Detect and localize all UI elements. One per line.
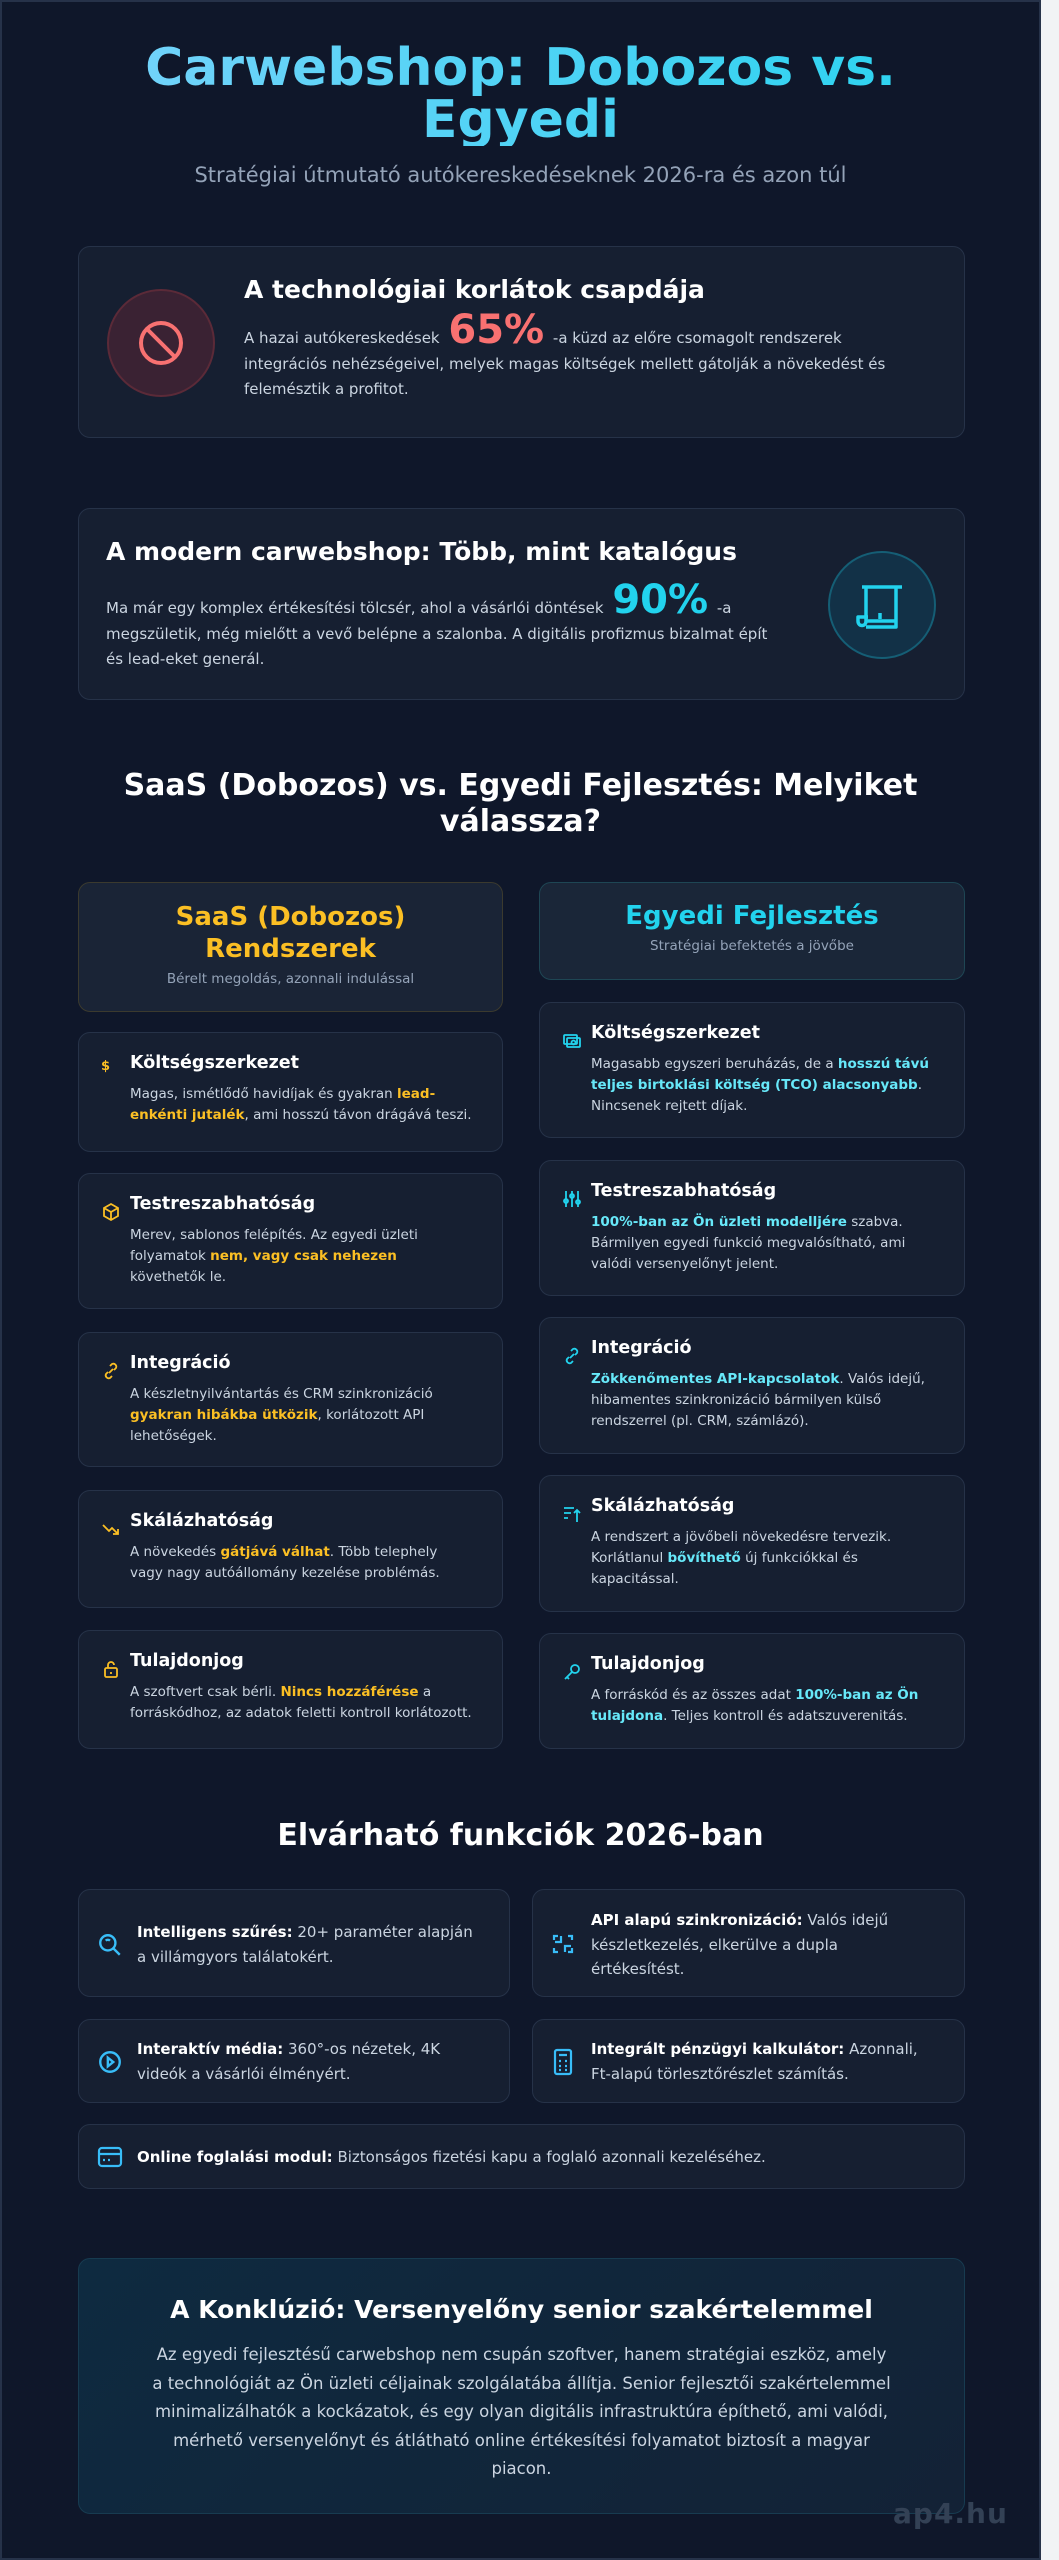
card: SaaS skálázhatóság: A növekedés gátjává válhat. Több telephely bbox=[130, 1544, 437, 1560]
heading: SaaS (Dobozos) bbox=[176, 902, 405, 932]
icon: money bbox=[563, 1034, 581, 1048]
icon: forbidden bbox=[107, 289, 215, 397]
subtitle: Stratégiai útmutató autókereskedéseknek 2026-ra és azon túl bbox=[194, 163, 847, 187]
icon: unlock bbox=[104, 1661, 118, 1678]
feature: intelligens szűrés: a villámgyors találatokért. bbox=[137, 1948, 334, 1966]
card: Egyedi költség: Költségszerkezet bbox=[591, 1023, 760, 1043]
section heading: SaaS vs Egyedi: válassza? bbox=[440, 804, 601, 839]
heading: Egyedi Fejlesztés bbox=[625, 901, 879, 931]
watermark: ap4.hu bbox=[893, 2497, 1008, 2530]
card: SaaS költség bbox=[78, 1032, 503, 1152]
card: Egyedi tulajdonjog: A forráskód és az összes adat 100%-ban az Ön bbox=[591, 1687, 918, 1703]
subtitle: Bérelt megoldás, azonnali indulással bbox=[167, 971, 414, 987]
feature: interaktív média bbox=[78, 2019, 510, 2103]
card: SaaS tulajdonjog: forráskódhoz, az adatok feletti kontroll korlátozott. bbox=[130, 1705, 472, 1721]
heading bbox=[176, 902, 405, 964]
text block bbox=[106, 577, 768, 668]
feature: intelligens szűrés: Intelligens szűrés: 20+ paraméter alapján bbox=[137, 1923, 473, 1941]
icon: card bbox=[98, 2146, 122, 2168]
card: SaaS tulajdonjog: A szoftvert csak bérli. Nincs hozzáférése a bbox=[130, 1684, 431, 1700]
heading: Rendszerek bbox=[205, 934, 376, 964]
text block bbox=[152, 2345, 891, 2478]
card: SaaS tulajdonjog bbox=[78, 1630, 503, 1749]
card: Egyedi költség: Magasabb egyszeri beruházás, de a hosszú távú bbox=[591, 1056, 929, 1072]
card: SaaS testreszabhatóság: Merev, sablonos felépítés. Az egyedi üzleti bbox=[130, 1227, 418, 1243]
feature: API szinkronizáció: API alapú szinkronizáció: Valós idejű bbox=[591, 1911, 888, 1929]
text block: A hazai autókereskedések 65% -a küzd az előre csomagolt rendszerek bbox=[244, 307, 842, 353]
section heading: SaaS vs Egyedi bbox=[124, 768, 917, 839]
feature: pénzügyi kalkulátor bbox=[532, 2019, 965, 2103]
icon: trend down bbox=[102, 1524, 119, 1535]
card: Egyedi integráció: Zökkenőmentes API-kapcsolatok. Valós idejű, bbox=[591, 1371, 925, 1387]
card: SaaS testreszabhatóság: követhetők le. bbox=[130, 1269, 226, 1285]
icon: sliders bbox=[563, 1191, 581, 1207]
panel: SaaS header bbox=[78, 882, 503, 1012]
panel: modern carwebshop bbox=[78, 508, 965, 700]
card: Egyedi testreszabhatóság: Testreszabhatóság bbox=[591, 1181, 776, 1201]
heading: A technológiai korlátok csapdája bbox=[244, 275, 705, 304]
icon: sort up bbox=[564, 1507, 581, 1522]
feature: pénzügyi kalkulátor: Integrált pénzügyi kalkulátor: Azonnali, bbox=[591, 2040, 918, 2058]
text block: Az egyedi fejlesztésű carwebshop nem csupán szoftver, hanem stratégiai eszköz, amely bbox=[157, 2345, 886, 2364]
card: SaaS integráció: lehetőségek. bbox=[130, 1428, 217, 1444]
card: Egyedi skálázhatóság: Korlátlanul bővíthető új funkciókkal és bbox=[591, 1550, 858, 1566]
card: SaaS integráció: gyakran hibákba ütközik, korlátozott API bbox=[130, 1407, 424, 1423]
text block: megszületik, még mielőtt a vevő belépne a szalonba. A digitális profizmus bizalmat épít bbox=[106, 624, 767, 642]
card: Egyedi költség bbox=[539, 1002, 965, 1138]
card: Egyedi skálázhatóság bbox=[539, 1475, 965, 1612]
text block: a technológiát az Ön üzleti céljainak szolgálatába állítja. Senior fejlesztői szakértelemmel bbox=[152, 2374, 891, 2392]
feature: API szinkronizáció: készletkezelés, elkerülve a dupla bbox=[591, 1936, 838, 1954]
card: Egyedi tulajdonjog: tulajdona. Teljes kontroll és adatszuverenitás. bbox=[591, 1708, 908, 1724]
card: SaaS testreszabhatóság bbox=[78, 1173, 503, 1309]
card: SaaS integráció bbox=[78, 1332, 503, 1467]
card: SaaS skálázhatóság: vagy nagy autóállomány kezelése problémás. bbox=[130, 1565, 440, 1581]
title: Egyedi bbox=[422, 90, 619, 150]
title bbox=[0, 42, 1041, 146]
icon: key bbox=[564, 1664, 580, 1680]
icon: play bbox=[99, 2051, 121, 2073]
section heading: SaaS vs Egyedi: SaaS (Dobozos) vs. Egyedi Fejlesztés: Melyiket bbox=[124, 768, 917, 803]
heading: A modern carwebshop: Több, mint katalógus bbox=[106, 537, 737, 566]
card: Egyedi integráció: Integráció bbox=[591, 1338, 692, 1358]
feature: online foglalás: Online foglalási modul: Biztonságos fizetési kapu a foglaló azonnali kezeléséhez. bbox=[137, 2148, 766, 2166]
card: SaaS tulajdonjog: Tulajdonjog bbox=[130, 1651, 244, 1671]
card: Egyedi integráció: rendszerrel (pl. CRM, számlázó). bbox=[591, 1413, 809, 1429]
text block: Ma már egy komplex értékesítési tölcsér, ahol a vásárlói döntések 90% -a bbox=[106, 577, 731, 623]
icon: link bbox=[566, 1348, 578, 1364]
card: SaaS költség: Költségszerkezet bbox=[130, 1053, 299, 1073]
card: Egyedi skálázhatóság: Skálázhatóság bbox=[591, 1496, 734, 1516]
text block: és lead-eket generál. bbox=[106, 650, 264, 668]
feature: interaktív média: Interaktív média: 360°-os nézetek, 4K bbox=[137, 2040, 440, 2058]
icon: calculator bbox=[554, 2048, 572, 2076]
text block bbox=[244, 307, 885, 398]
text block: minimalizálhatók a kockázatok, és egy olyan digitális infrastruktúra építhető, ami valódi, bbox=[155, 2402, 888, 2421]
card: Egyedi testreszabhatóság: Bármilyen egyedi funkció megvalósítható, ami bbox=[591, 1235, 905, 1251]
text block: mérhető versenyelőnyt és átlátható online értékesítési folyamatot biztosít a magyar bbox=[173, 2430, 870, 2450]
icon: scroll bbox=[828, 551, 936, 659]
card: Egyedi tulajdonjog: Tulajdonjog bbox=[591, 1654, 705, 1674]
panel: technológiai korlátok bbox=[78, 246, 965, 438]
card: SaaS testreszabhatóság: Testreszabhatóság bbox=[130, 1194, 315, 1214]
panel: Egyedi header bbox=[539, 882, 965, 980]
card: Egyedi testreszabhatóság bbox=[539, 1160, 965, 1296]
card: SaaS költség: Magas, ismétlődő havidíjak és gyakran lead- bbox=[130, 1086, 435, 1102]
title: Carwebshop: Dobozos vs. bbox=[145, 38, 896, 98]
card: Egyedi testreszabhatóság: 100%-ban az Ön üzleti modelljére szabva. bbox=[591, 1214, 903, 1230]
icon: box bbox=[103, 1203, 119, 1221]
feature: pénzügyi kalkulátor: Ft-alapú törlesztőrészlet számítás. bbox=[591, 2064, 849, 2082]
icon: sync corners bbox=[552, 1934, 574, 1954]
card: Egyedi testreszabhatóság: valódi versenyelőnyt jelent. bbox=[591, 1256, 778, 1272]
card: SaaS integráció: Integráció bbox=[130, 1353, 231, 1373]
card: Egyedi integráció: hibamentes szinkronizáció bármilyen külső bbox=[591, 1392, 881, 1408]
card: Egyedi integráció bbox=[539, 1317, 965, 1454]
subtitle: Stratégiai befektetés a jövőbe bbox=[650, 938, 854, 954]
panel: konklúzió bbox=[78, 2258, 965, 2514]
text block: piacon. bbox=[491, 2459, 552, 2478]
card: SaaS skálázhatóság: Skálázhatóság bbox=[130, 1511, 273, 1531]
card: SaaS testreszabhatóság: folyamatok nem, vagy csak nehezen bbox=[130, 1248, 397, 1264]
heading: A Konklúzió: Versenyelőny senior szakértelemmel bbox=[170, 2295, 873, 2324]
feature: interaktív média: videók a vásárlói élményért. bbox=[137, 2064, 351, 2082]
feature: intelligens szűrés bbox=[78, 1889, 510, 1997]
icon: dollar: $ bbox=[101, 1059, 110, 1074]
feature: API szinkronizáció bbox=[532, 1889, 965, 1997]
card: Egyedi tulajdonjog bbox=[539, 1633, 965, 1749]
card: SaaS skálázhatóság bbox=[78, 1490, 503, 1608]
card: Egyedi skálázhatóság: kapacitással. bbox=[591, 1571, 679, 1587]
feature: API szinkronizáció: értékesítést. bbox=[591, 1960, 684, 1978]
feature: online foglalás bbox=[78, 2124, 965, 2189]
text block: felemésztik a profitot. bbox=[244, 380, 409, 398]
card: Egyedi költség: Nincsenek rejtett díjak. bbox=[591, 1098, 747, 1114]
card: SaaS költség: enkénti jutalék, ami hosszú távon drágává teszi. bbox=[130, 1107, 472, 1123]
icon: search bbox=[99, 1934, 120, 1956]
text block: integrációs nehézségeivel, melyek magas költségek mellett gátolják a növekedést és bbox=[244, 354, 885, 372]
card: Egyedi költség: teljes birtoklási költség (TCO) alacsonyabb. bbox=[591, 1077, 922, 1093]
card: SaaS integráció: A készletnyilvántartás és CRM szinkronizáció bbox=[130, 1386, 433, 1402]
section heading: funkciók: Elvárható funkciók 2026-ban bbox=[277, 1818, 764, 1853]
icon: link bbox=[104, 1362, 118, 1380]
card: Egyedi skálázhatóság: A rendszert a jövőbeli növekedésre tervezik. bbox=[591, 1529, 891, 1545]
